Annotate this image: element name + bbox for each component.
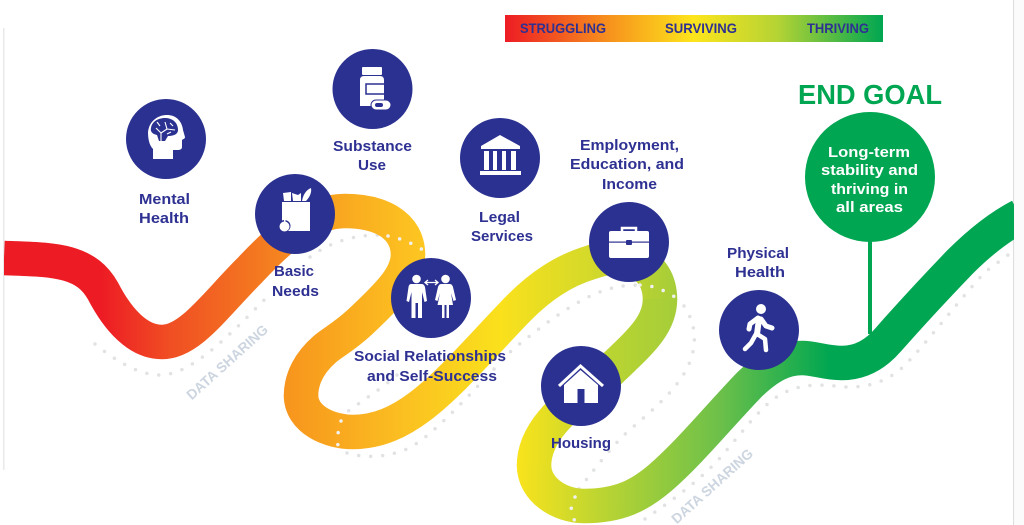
- mental health node: Mental: [139, 191, 190, 208]
- substance use node: [332, 49, 412, 174]
- social relationships node: Social Relationships: [354, 348, 506, 365]
- end goal marker: stability and: [821, 162, 918, 179]
- dotted data sharing path: [95, 235, 1012, 519]
- legal services node: [460, 118, 540, 245]
- basic needs node: Basic: [274, 263, 314, 280]
- physical health node: Health: [735, 264, 785, 281]
- basic needs node: [255, 174, 335, 300]
- social relationships node: and Self-Success: [367, 368, 497, 385]
- legal services node: Services: [471, 228, 533, 245]
- end goal marker: thriving in: [831, 181, 908, 198]
- physical health node: [719, 245, 799, 370]
- employment education income node: [570, 137, 684, 282]
- legend bar: STRUGGLING: [520, 20, 606, 36]
- substance use node: Use: [358, 157, 386, 174]
- legend bar: [505, 15, 883, 42]
- end goal marker: Long-term: [828, 144, 910, 161]
- legend bar: SURVIVING: [665, 20, 737, 36]
- basic needs node: Needs: [272, 283, 319, 300]
- housing node: [541, 346, 621, 452]
- physical health node: Physical: [727, 245, 789, 262]
- legal services node: Legal: [479, 209, 520, 226]
- gradient journey ribbon: [4, 211, 1020, 506]
- legend bar: THRIVING: [807, 20, 869, 36]
- end goal marker: [805, 112, 935, 334]
- substance use node: Substance: [333, 138, 412, 155]
- end goal heading: END GOAL: [798, 79, 942, 110]
- end goal marker: all areas: [836, 199, 903, 216]
- data sharing label 1: DATA SHARING: [183, 321, 271, 403]
- housing node: Housing: [551, 435, 611, 452]
- social relationships node: [354, 258, 506, 385]
- employment education income node: Education, and: [570, 156, 684, 173]
- dots crossing the ribbon: [338, 236, 675, 521]
- employment education income node: Income: [602, 176, 657, 193]
- employment education income node: Employment,: [580, 137, 679, 154]
- data sharing label 2: DATA SHARING: [668, 445, 756, 525]
- mental health node: Health: [139, 210, 189, 227]
- mental health node: [126, 99, 206, 227]
